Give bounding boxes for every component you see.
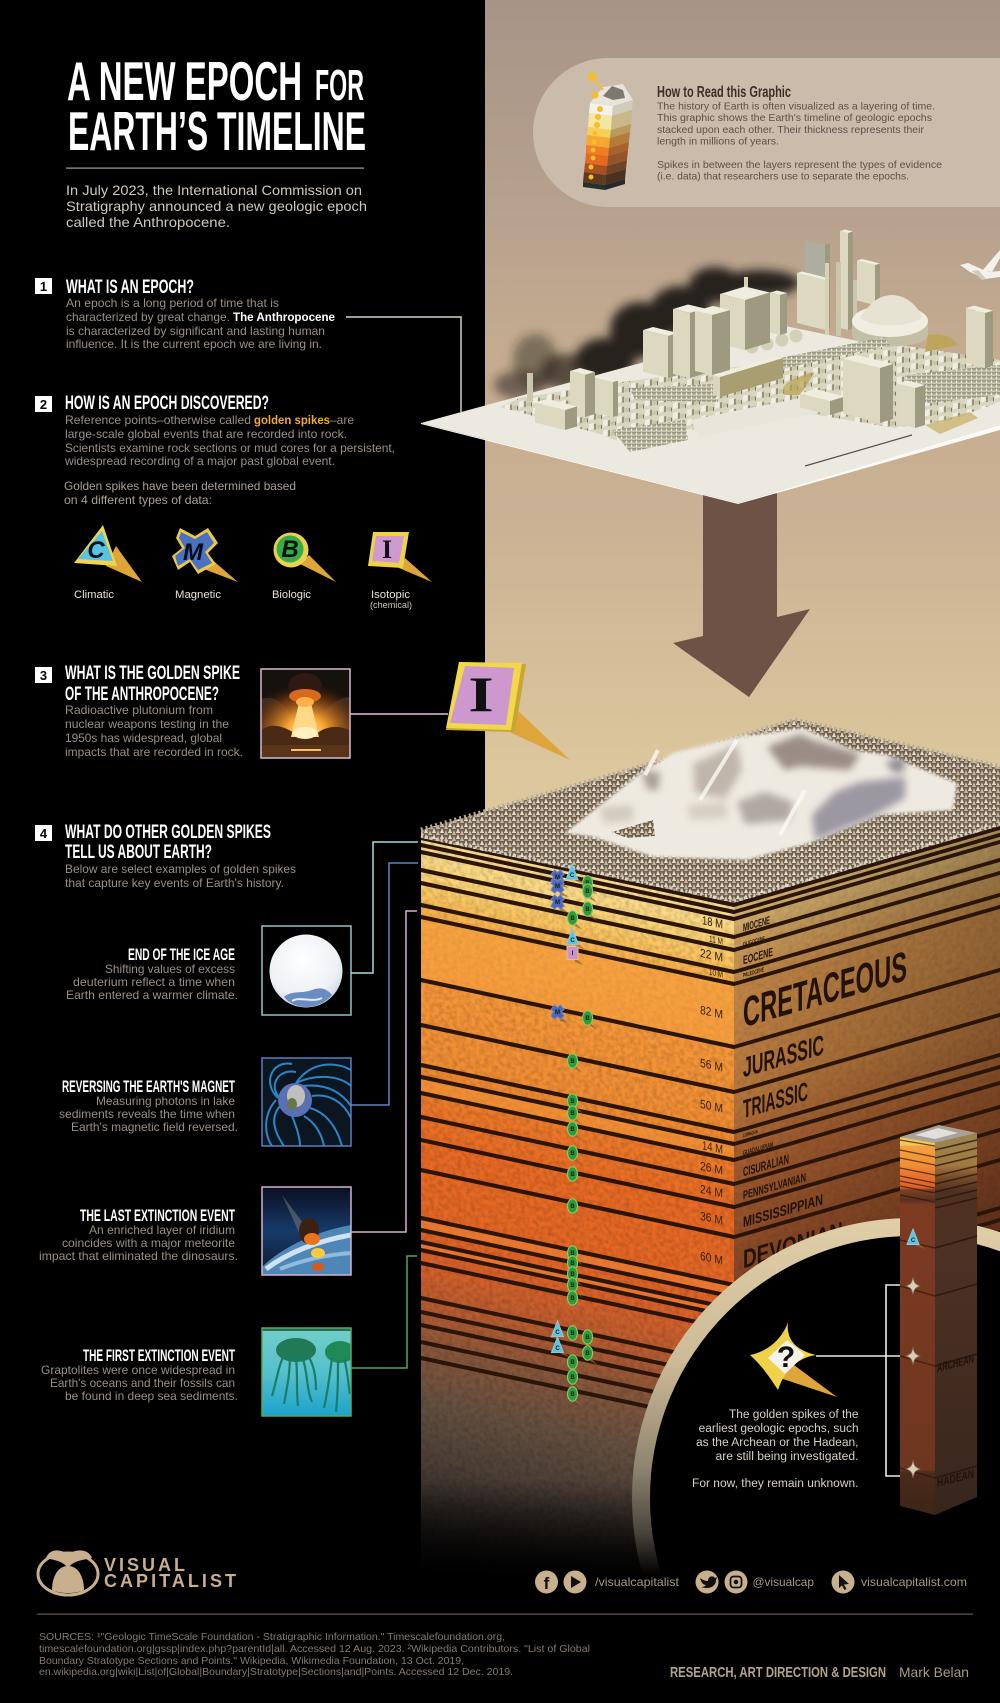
legend: climatic spike: C: [87, 537, 105, 564]
body 2: [64, 413, 395, 468]
epoch names: EOCENE: [743, 945, 773, 967]
factory blocks: [643, 277, 787, 378]
layer durations: 14 M: [702, 1138, 723, 1157]
epoch names: [743, 875, 907, 1274]
image: graptolites: [262, 1328, 355, 1416]
body 4: [65, 862, 296, 890]
social: website: visualcapitalist.com: [861, 1575, 967, 1589]
spike markers along the strata: B: [570, 1261, 575, 1267]
spike markers along the strata: C: [555, 1330, 560, 1336]
mountain: [565, 728, 957, 860]
example: first extinction event: Earth's oceans and their fossils can: [50, 1376, 235, 1390]
white open plaza: [690, 398, 830, 437]
body 1: influence. It is the current epoch we are living in.: [66, 337, 322, 351]
panel body: (i.e. data) that researchers use to separate the epochs.: [657, 170, 909, 182]
unknown spikes text: earliest geologic epochs, such: [699, 1423, 859, 1435]
section 4: other golden spikes: [35, 822, 296, 890]
sources: [39, 1631, 590, 1678]
spike markers along the strata: B: [570, 1204, 575, 1210]
sources: SOURCES: ¹"Geologic TimeScale Foundation - Stratigraphic Information." Timescalefoundation.org,: [39, 1631, 505, 1643]
layer durations: 26 M: [700, 1159, 723, 1178]
spike markers along the strata: M: [555, 884, 560, 890]
body 3: [65, 703, 243, 759]
layer durations: 60 M: [700, 1249, 723, 1268]
example: last extinction event: impact that eliminated the dinosaurs.: [39, 1249, 238, 1263]
section 1: what is an epoch: [35, 277, 335, 351]
heading 3: OF THE ANTHROPOCENE?: [65, 684, 219, 705]
layer durations: 82 M: [700, 1003, 723, 1022]
spike markers along the strata: B: [585, 881, 590, 887]
unknown spikes text: [692, 1409, 859, 1490]
panel body: Spikes in between the layers represent the types of evidence: [657, 159, 942, 171]
spike markers along the strata: B: [585, 1016, 590, 1022]
epoch names: PALEOCENE: [743, 966, 764, 979]
spike markers along the strata: B: [570, 916, 575, 922]
logo: visual capitalist: [38, 1550, 236, 1595]
title: [67, 50, 366, 162]
panel body: [657, 100, 942, 182]
body 4: Below are select examples of golden spikes: [65, 862, 296, 876]
body 2: large-scale global events that are recorded into rock.: [65, 427, 347, 441]
spike markers along the strata: B: [585, 907, 590, 913]
example: first extinction event: be found in deep sea sediments.: [65, 1389, 238, 1403]
earth block: forest surface: [421, 720, 1000, 903]
epoch names: MISSISSIPPIAN: [743, 1191, 823, 1231]
example: first extinction event: Graptolites were once widespread in: [41, 1363, 235, 1377]
panel body: stacked upon each other. Their thickness represents their: [657, 124, 924, 136]
number badge 2: [35, 396, 52, 412]
layer durations: 56 M: [700, 1056, 723, 1075]
legend: isotopic spike: I: [382, 535, 392, 564]
image: meteor impact: [262, 1187, 351, 1275]
body 2: –are: [330, 413, 354, 427]
social: facebook and youtube: [535, 1570, 680, 1594]
background: tan sky panel: [485, 0, 1000, 860]
icon: airplane: [960, 250, 1000, 280]
epoch names: LOPINGIAN: [743, 1129, 758, 1139]
section 2: how is an epoch discovered: [35, 393, 395, 507]
number badge 4: 4: [40, 826, 48, 841]
epoch names: DEVONIAN: [743, 1216, 843, 1274]
spike markers along the strata: B: [570, 1059, 575, 1065]
epoch names: CISURALIAN: [743, 1151, 789, 1179]
example: last extinction event: An enriched layer of iridium: [89, 1223, 235, 1237]
title: FOR: [315, 61, 364, 110]
legend: magnetic spike: Magnetic: [175, 589, 222, 601]
example: reversing the magnet: Measuring photons in lake: [96, 1094, 235, 1108]
number badge 1: 1: [40, 279, 47, 294]
stratigraphic column: [900, 1125, 977, 1515]
example: last extinction event: [39, 1206, 238, 1263]
legend: isotopic spike: Isotopic: [371, 589, 411, 601]
low-rise district texture: [500, 345, 1000, 450]
number badge 4: [35, 825, 52, 841]
lead-in to spike types: on 4 different types of data:: [64, 493, 212, 507]
layer durations: 24 M: [700, 1182, 723, 1201]
example: first extinction event: [41, 1346, 238, 1403]
connector: magnet: [351, 863, 418, 1105]
panel body: This graphic shows the Earth's timeline of geologic epochs: [657, 112, 932, 124]
example: last extinction event: coincides with a major meteorite: [62, 1236, 235, 1250]
spike markers along the strata: B: [570, 1127, 575, 1133]
social: twitter and instagram: @visualcap: [752, 1575, 814, 1589]
body 1: [66, 296, 335, 351]
layer durations: 10 M: [709, 967, 723, 980]
spike markers along the strata: B: [570, 1172, 575, 1178]
epoch names: TRIASSIC: [743, 1076, 808, 1124]
large isotopic spike: I: [468, 666, 494, 722]
connector: ice age: [351, 842, 418, 973]
legend: climatic spike: Climatic: [74, 589, 114, 601]
earth block: left face strata: [421, 838, 734, 1635]
body 2: Reference points–otherwise called: [65, 413, 251, 427]
icon: unknown question spike: ?: [777, 1341, 795, 1374]
example: reversing the magnet: Earth's magnetic field reversed.: [71, 1120, 238, 1134]
spike markers along the strata: M: [555, 875, 560, 881]
legend: biologic spike: Biologic: [272, 589, 311, 601]
example: end of the ice age: Earth entered a warmer climate.: [66, 988, 238, 1002]
body 3: impacts that are recorded in rock.: [65, 745, 243, 759]
lead-in to spike types: Golden spikes have been determined based: [64, 479, 296, 493]
legend: biologic spike: B: [281, 536, 299, 563]
unknown spikes text: The golden spikes of the: [729, 1409, 858, 1421]
domes row: [746, 330, 802, 354]
panel body: length in millions of years.: [657, 136, 779, 148]
body 2: widespread recording of a major past global event.: [64, 454, 335, 468]
heading 3: WHAT IS THE GOLDEN SPIKE: [65, 663, 240, 684]
intro text: Stratigraphy announced a new geologic epoch: [66, 198, 367, 214]
legend: isotopic spike: (chemical): [370, 600, 412, 611]
layer durations: 36 M: [700, 1209, 723, 1228]
spike markers along the strata: B: [585, 1335, 590, 1341]
example: reversing the magnet: REVERSING THE EARTH'S MAGNET: [62, 1077, 235, 1096]
spike markers along the strata: C: [570, 938, 575, 944]
spike markers along the strata: I: [572, 951, 574, 957]
spike markers along the strata: B: [570, 1099, 575, 1105]
number badge 1: [35, 278, 52, 294]
unknown spikes text: as the Archean or the Hadean,: [696, 1437, 858, 1449]
social: website: [832, 1570, 967, 1594]
spike markers along the strata: [551, 864, 598, 1406]
title: A NEW EPOCH: [67, 50, 302, 112]
body 1: An epoch is a long period of time that is: [66, 296, 279, 310]
unknown panel: ring and black disc: [641, 1227, 1000, 1703]
spike markers along the strata: C: [570, 873, 575, 879]
heading 1: WHAT IS AN EPOCH?: [66, 277, 194, 298]
intro text: called the Anthropocene.: [66, 214, 230, 230]
column epoch labels: ARCHEAN: [937, 1352, 974, 1375]
unknown spikes text: For now, they remain unknown.: [692, 1478, 858, 1490]
sources: en.wikipedia.org|wiki|List|of|Global|Boundary|Stratotype|Sections|and|Points. Accessed 12 Dec. 2019.: [39, 1666, 513, 1678]
spike markers along the strata: B: [585, 1351, 590, 1357]
number badge 3: 3: [40, 668, 47, 683]
layer durations: 50 M: [700, 1097, 723, 1116]
body 3: nuclear weapons testing in the: [65, 717, 229, 731]
info panel: how to read this graphic: [533, 58, 1000, 207]
icon: mini layer stack: [583, 72, 633, 190]
column spike markers: C: [911, 1238, 916, 1244]
example: last extinction event: THE LAST EXTINCTION EVENT: [80, 1206, 235, 1225]
spike markers along the strata: B: [570, 1296, 575, 1302]
icon: unknown question spike: [750, 1322, 837, 1397]
example: end of the ice age: [66, 945, 238, 1002]
body 3: Radioactive plutonium from: [65, 703, 213, 717]
spike markers along the strata: M: [555, 900, 560, 906]
stratigraphic column: HADEAN: [937, 1467, 974, 1490]
body 1: is characterized by significant and lasting human: [66, 324, 325, 338]
heading 3: [65, 663, 240, 705]
spike markers along the strata: B: [570, 1111, 575, 1117]
left and front blocks: [527, 306, 993, 434]
epoch names: MIOCENE: [743, 915, 770, 934]
earth block: right face strata: [734, 828, 1000, 1365]
heading 4: [65, 822, 271, 863]
logo: visual capitalist: VISUAL: [104, 1555, 185, 1575]
back towers: [797, 230, 880, 336]
intro text: [66, 182, 367, 230]
title: EARTH’S TIMELINE: [68, 100, 366, 162]
lead-in to spike types: [64, 479, 296, 507]
connector: last extinction: [351, 911, 417, 1232]
legend: climatic spike: [74, 525, 142, 601]
image: nuclear explosion: [241, 669, 371, 769]
heading 4: TELL US ABOUT EARTH?: [65, 842, 212, 863]
connector: first extinction: [351, 1256, 417, 1368]
example: first extinction event: THE FIRST EXTINCTION EVENT: [83, 1346, 235, 1365]
social: facebook and youtube: /visualcapitalist: [595, 1575, 680, 1589]
example: end of the ice age: END OF THE ICE AGE: [128, 945, 235, 964]
panel body: The history of Earth is often visualized as a layering of time.: [657, 100, 935, 112]
legend: isotopic spike: [368, 532, 432, 611]
heading 2: HOW IS AN EPOCH DISCOVERED?: [65, 393, 269, 414]
image: magnetic field: [262, 1058, 351, 1146]
body 3: 1950s has widespread, global: [65, 731, 222, 745]
panel heading: How to Read this Graphic: [657, 84, 791, 101]
column spike markers: [906, 1229, 925, 1478]
number badge 2: 2: [40, 397, 47, 412]
spike markers along the strata: M: [555, 1010, 560, 1016]
spike markers along the strata: B: [570, 1375, 575, 1381]
example: end of the ice age: Shifting values of excess: [105, 962, 235, 976]
body 1: The Anthropocene: [233, 310, 335, 324]
spike markers along the strata: B: [570, 1331, 575, 1337]
spike markers along the strata: B: [570, 1151, 575, 1157]
legend: magnetic spike: M: [183, 539, 204, 566]
arrow: from city to earth block: [673, 480, 810, 697]
credits: Mark Belan: [899, 1664, 969, 1680]
example: end of the ice age: deuterium reflect a time when: [73, 975, 235, 989]
section 3: golden spike of the anthropocene: [35, 663, 448, 769]
social: facebook and youtube: f: [544, 1574, 550, 1593]
spike markers along the strata: B: [570, 1392, 575, 1398]
connector: anthropocene to city plate: [346, 317, 461, 412]
example: reversing the magnet: sediments reveals the time when: [59, 1107, 235, 1121]
fade of strata into black: [415, 1480, 675, 1575]
body 2: golden spikes: [254, 413, 330, 427]
sources: Boundary Stratotype Sections and Points." Wikipedia, Wikimedia Foundation, 13 Oct. 2019,: [39, 1655, 464, 1667]
legend: magnetic spike: [172, 528, 238, 601]
social: twitter and instagram: [696, 1570, 814, 1594]
epoch names: GUADALUPIAN: [743, 1141, 773, 1157]
layer durations: 18 M: [702, 913, 723, 932]
example: reversing the magnet: [59, 1077, 238, 1134]
spike markers along the strata: B: [585, 889, 590, 895]
image: icy earth: [262, 926, 351, 1015]
legend: biologic spike: [272, 532, 336, 601]
spike markers along the strata: B: [570, 1360, 575, 1366]
bracket to column: [816, 1285, 900, 1476]
intro text: In July 2023, the International Commission on: [66, 182, 362, 198]
smoke plume: [494, 267, 800, 399]
spike markers along the strata: B: [570, 1251, 575, 1257]
sources: timescalefoundation.org|gssp|index.php?parentId|all. Accessed 12 Aug. 2023. ²Wikipedia Contributors. "List of Global: [39, 1643, 590, 1655]
epoch names: OLIGOCENE: [743, 935, 765, 948]
domed building: [852, 295, 958, 352]
logo: visual capitalist: CAPITALIST: [104, 1571, 236, 1591]
layer durations: [700, 913, 723, 1268]
epoch names: JURASSIC: [743, 1029, 824, 1084]
epoch names: PENNSYLVANIAN: [743, 1170, 806, 1202]
unknown spikes text: are still being investigated.: [716, 1451, 858, 1463]
connector: nuclear image to I spike: [350, 713, 448, 715]
body 2: Scientists examine rock sections or mud cores for a persistent,: [65, 441, 395, 455]
number badge 3: [35, 667, 52, 683]
heading 4: WHAT DO OTHER GOLDEN SPIKES: [65, 822, 271, 843]
city slab illustration: [421, 230, 1000, 504]
tree rows and roads: [612, 337, 1000, 466]
body 4: that capture key events of Earth's history.: [65, 876, 284, 890]
body 1: characterized by great change.: [66, 310, 230, 324]
plate: [421, 325, 1000, 503]
spike markers along the strata: C: [555, 1346, 560, 1352]
large isotopic spike: [446, 662, 570, 760]
spike markers along the strata: B: [570, 1283, 575, 1289]
spike markers along the strata: B: [570, 1272, 575, 1278]
credits: RESEARCH, ART DIRECTION & DESIGN: [670, 1665, 886, 1681]
layer durations: 22 M: [700, 946, 723, 965]
layer durations: 11 M: [709, 934, 723, 947]
